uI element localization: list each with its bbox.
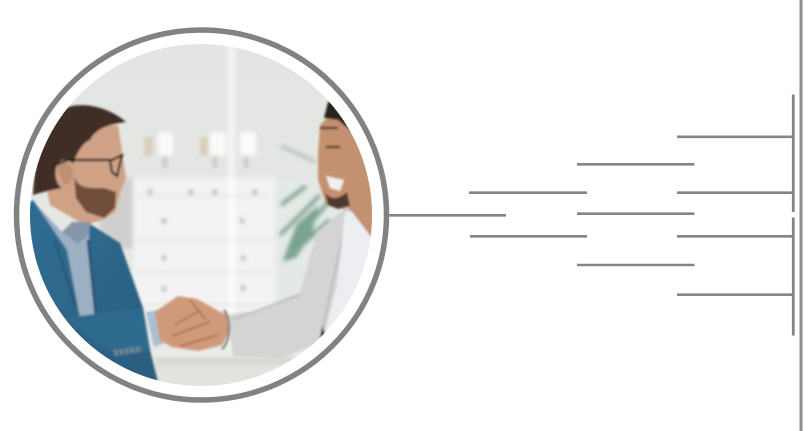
glasses	[52, 155, 122, 176]
neck and face	[45, 125, 126, 225]
beard	[74, 176, 116, 218]
outer grey ring	[16, 30, 386, 400]
neck and face	[316, 117, 372, 238]
shaking hands	[155, 296, 229, 351]
grey suit	[228, 206, 352, 358]
right brackets	[792, 94, 795, 336]
column 2 lines	[577, 164, 694, 265]
jacket	[25, 200, 158, 395]
right man	[227, 100, 380, 358]
shirt	[38, 206, 94, 316]
column 1 lines	[469, 193, 587, 236]
left man	[25, 105, 165, 395]
connector from photo	[389, 214, 506, 217]
office background	[30, 44, 344, 386]
photo: two businessmen shaking hands	[25, 40, 380, 395]
white shirt	[324, 211, 371, 334]
ear	[57, 161, 73, 184]
shirt cuff	[146, 310, 165, 347]
hair	[33, 105, 126, 195]
right vertical rule	[800, 0, 802, 431]
column 3 lines	[677, 137, 793, 295]
